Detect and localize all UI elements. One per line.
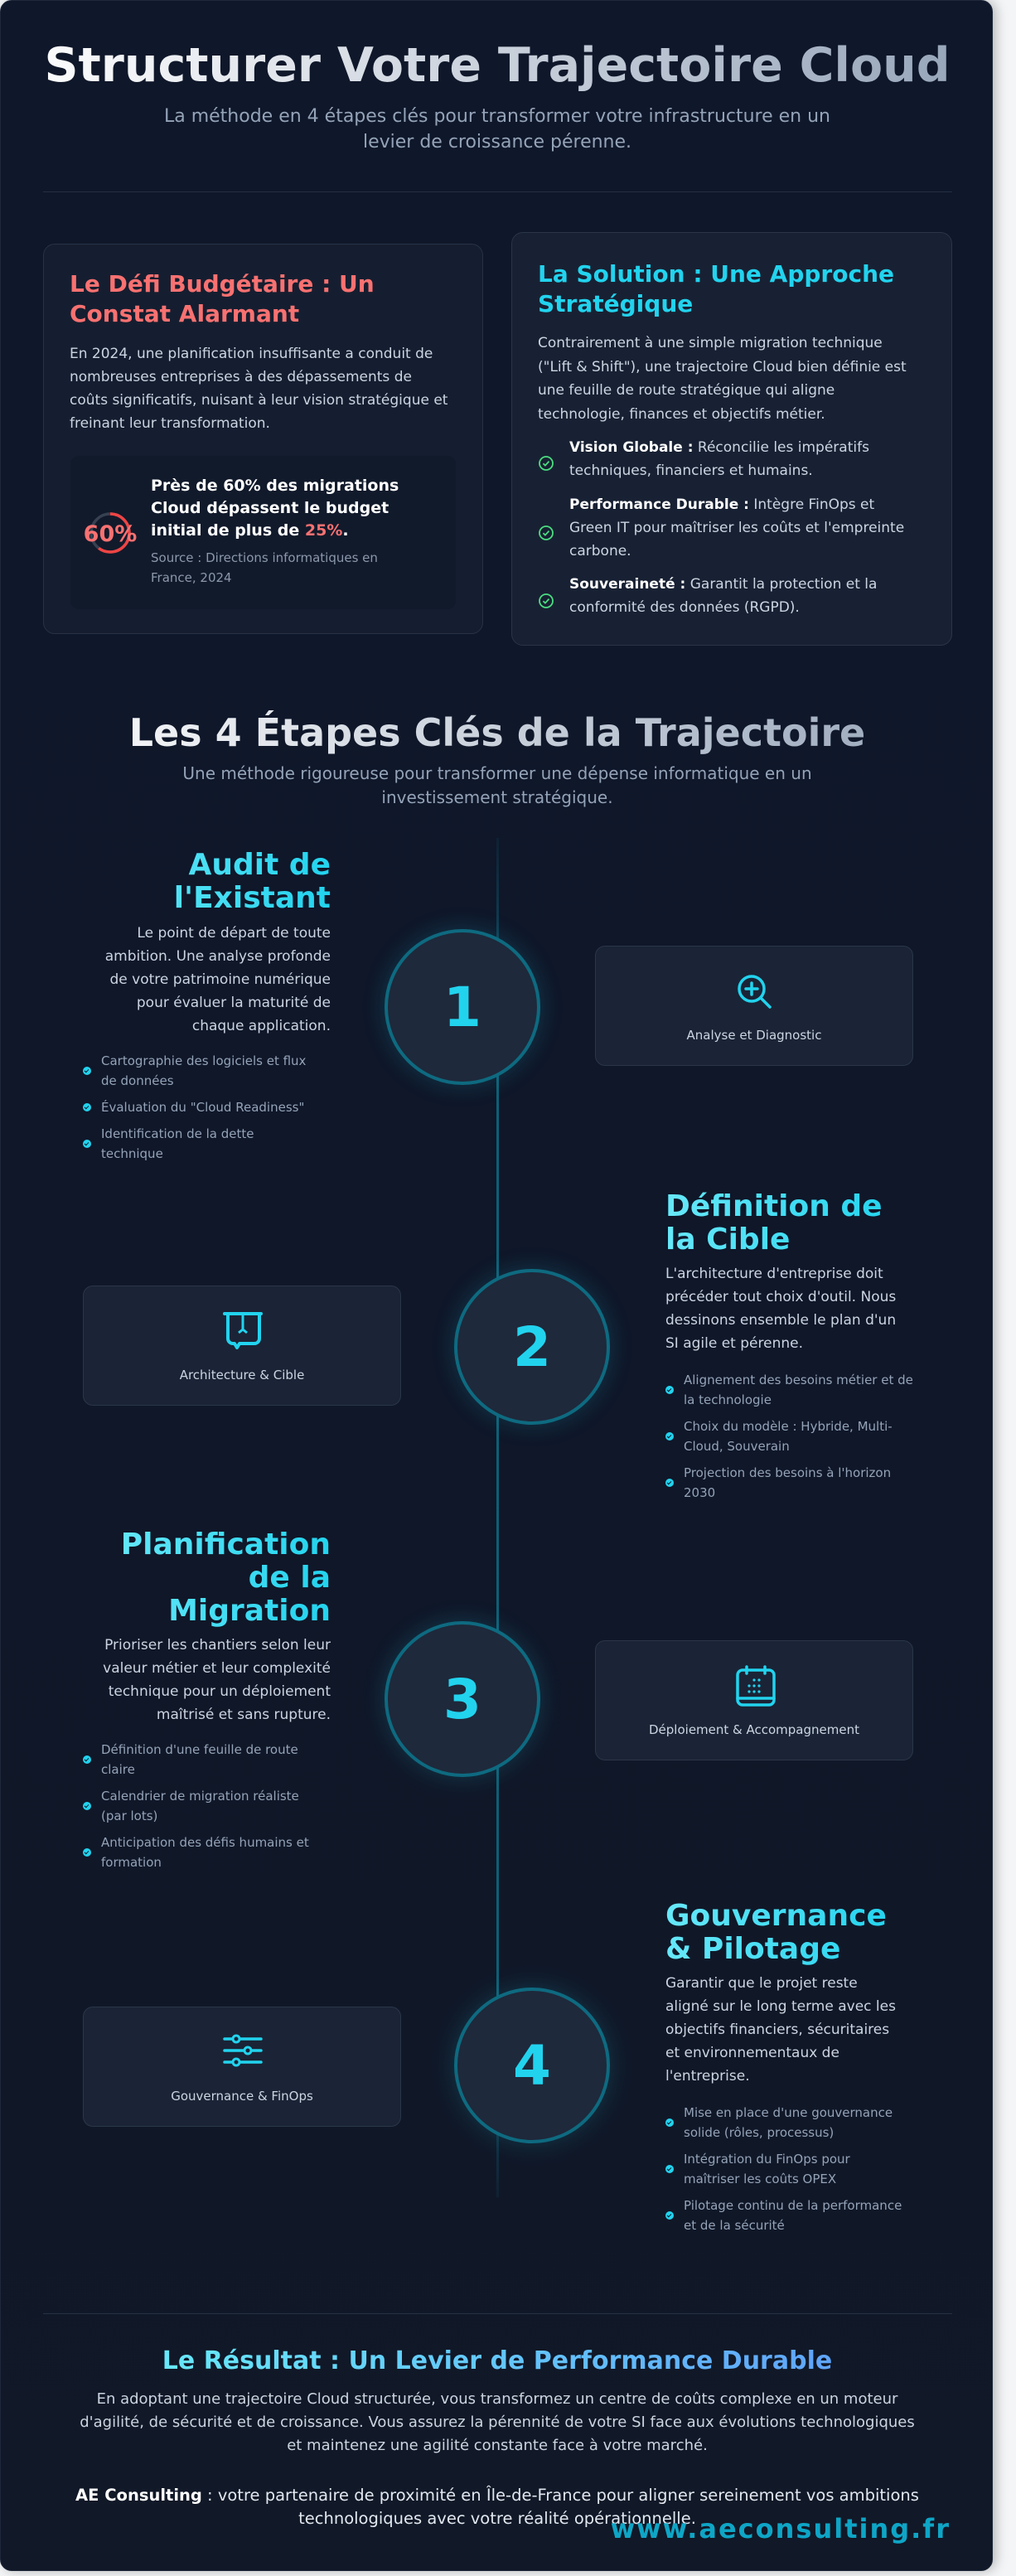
bullets: step 3 [83,1742,309,1870]
list: points: Performance Durable : Intègre FinOps et Green IT pour maîtriser les coûts et l'empreinte carbone. [569,496,904,559]
step 2 [83,1189,913,1500]
circle: 4: 4 [513,2034,551,2097]
website: www.aeconsulting.fr [611,2513,951,2545]
icon: check [539,525,554,540]
source: Source : Directions informatiques en France, 2024 [151,550,378,585]
bullets: step 4: Mise en place d'une gouvernance solide (rôles, processus) [684,2105,893,2140]
step 3 [83,1528,913,1870]
card: architecture: Architecture & Cible [180,1368,304,1382]
list: points: Vision Globale : Réconcilie les impératifs techniques, financiers et humains. [569,439,869,479]
title: Structurer Votre Trajectoire Cloud [45,38,950,93]
bullets: step 4: Pilotage continu de la performance et de la sécurité [684,2198,902,2233]
bullets: step 1: Évaluation du "Cloud Readiness" [101,1100,304,1115]
chart: ring 60% [84,512,137,554]
heading: step 2: Définition de la Cible [665,1189,883,1257]
heading: étapes [1,707,994,758]
heading: défi: Le Défi Budgétaire : Un Constat Alarmant [70,270,375,327]
circle: 4 [454,1988,610,2143]
panel: solution [511,232,952,646]
icon: sliders [223,2034,263,2067]
text: step 4: Garantir que le projet reste aligné sur le long terme avec les objectifs financiers, sécuritaires et environnementaux de l'entreprise. [665,1975,896,2085]
list: points: Souveraineté : Garantit la protection et la conformité des données (RGPD). [569,576,877,616]
bullets: step 4 [665,2105,902,2233]
card: gouvernance: Gouvernance & FinOps [171,2089,313,2104]
card: architecture [83,1286,401,1406]
text block: résultat: En adoptant une trajectoire Cloud structurée, vous transformez un centre de coûts complexe en un moteur d'agilité, de sécurité et de croissance. Vous assurez la pérennité de votre SI face aux évolutions technologiques et maintenez une agilité constante face à votre marché. [80,2390,915,2454]
callout: stat 60% [70,456,456,609]
timeline line [496,838,499,2197]
card: déploiement [595,1640,913,1760]
icon: calendar [736,1665,776,1707]
card: analyse [595,946,913,1066]
circle: 3 [385,1621,540,1777]
bullets: step 2 [665,1373,913,1500]
icon: check [539,593,554,608]
circle: 2: 2 [513,1315,551,1379]
heading: step 1 [107,849,331,915]
heading: step 3: Planification de la Migration [121,1528,331,1628]
bullets: step 3: Anticipation des défis humains et formation [101,1835,309,1870]
icon: check [539,456,554,471]
heading: solution: La Solution : Une Approche Stratégique [538,260,894,317]
list: points [539,439,904,616]
panel: défi budgétaire [43,244,483,634]
circle: 3: 3 [443,1668,481,1731]
bullets: step 1: Identification de la dette technique [101,1126,254,1161]
step 1 [83,848,913,1161]
step 4 [83,1899,902,2233]
bullets: step 4: Intégration du FinOps pour maîtriser les coûts OPEX [684,2152,850,2186]
subtitle: étapes: Une méthode rigoureuse pour transformer une dépense informatique en un investissement stratégique. [182,763,812,807]
heading: étapes: Les 4 Étapes Clés de la Trajectoire [129,710,865,755]
text block: stat: Près de 60% des migrations Cloud dépassent le budget initial de plus de 25%. [151,477,399,540]
icon: magnifier [738,975,772,1009]
chart: ring 60%: 60% [84,521,137,547]
heading: step 4: Gouvernance & Pilotage [665,1899,887,1966]
bullets: step 3: Calendrier de migration réaliste (par lots) [101,1789,299,1823]
heading: résultat: Le Résultat : Un Levier de Performance Durable [162,2346,832,2375]
text: step 1: Le point de départ de toute ambition. Une analyse profonde de votre patrimoine numérique pour évaluer la maturité de chaque application. [105,925,331,1034]
text block: AE Consulting: AE Consulting : votre partenaire de proximité en Île-de-France pour aligner sereinement vos ambitions technologiques avec votre réalité opérationnelle. [75,2486,919,2528]
text block: défi: En 2024, une planification insuffisante a conduit de nombreuses entreprises à des dépassements de coûts significatifs, nuisant à leur vision stratégique et freinant leur transformation. [70,346,448,432]
text: step 3: Prioriser les chantiers selon leur valeur métier et leur complexité technique pour un déploiement maîtrisé et sans rupture. [103,1637,331,1723]
bullets: step 1: Cartographie des logiciels et flux de données [101,1053,306,1088]
bullets: step 2: Alignement des besoins métier et de la technologie [684,1373,913,1407]
circle: 2 [454,1269,610,1425]
bullets: step 2: Projection des besoins à l'horizon 2030 [684,1465,891,1500]
subtitle: La méthode en 4 étapes clés pour transformer votre infrastructure en un levier de croissance pérenne. [164,106,830,153]
heading: step 1: Audit de l'Existant [174,848,331,915]
bullets: step 2: Choix du modèle : Hybride, Multi-Cloud, Souverain [684,1419,893,1454]
card: gouvernance [83,2007,401,2127]
card: déploiement: Déploiement & Accompagnement [649,1722,859,1737]
text block: solution: Contrairement à une simple migration technique ("Lift & Shift"), une trajectoire Cloud bien définie est une feuille de route stratégique qui aligne technologie, finances et objectifs métier. [538,335,907,423]
icon: blueprint [223,1312,263,1349]
circle: 1: 1 [443,975,481,1039]
bullets: step 3: Définition d'une feuille de route claire [101,1742,298,1777]
circle: 1 [385,929,540,1085]
bullets: step 1 [83,1053,306,1161]
text: step 2: L'architecture d'entreprise doit précéder tout choix d'outil. Nous dessinons ensemble le plan d'un SI agile et pérenne. [665,1266,896,1352]
card: analyse: Analyse et Diagnostic [687,1028,821,1043]
